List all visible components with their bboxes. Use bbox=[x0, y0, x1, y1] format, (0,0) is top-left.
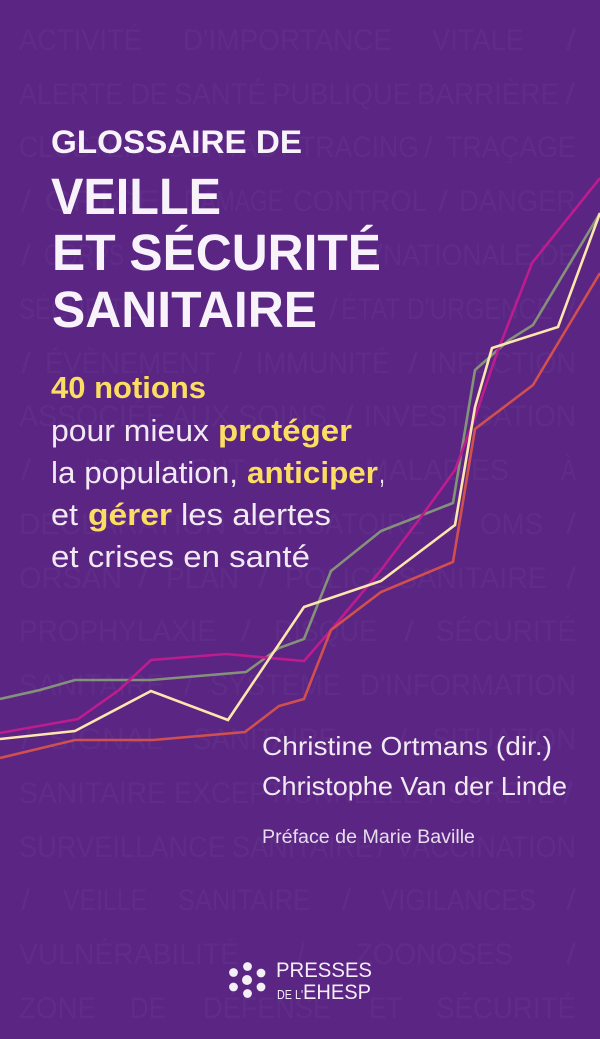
subtitle line: et gérer les alertes bbox=[51, 497, 331, 532]
background glossary word pattern: DE bbox=[130, 992, 166, 1025]
subtitle text block bbox=[51, 370, 385, 574]
background glossary word pattern: ASSOCIÉE AUX SOINS bbox=[19, 400, 327, 433]
background glossary word pattern: SANITAIRE bbox=[232, 831, 373, 864]
background glossary word pattern: INFECTION bbox=[430, 347, 576, 380]
background glossary word pattern: EXCEPTIONNELLE bbox=[174, 777, 421, 810]
publisher name: EHESP bbox=[303, 981, 371, 1004]
preface credit: Préface de Marie Baville bbox=[262, 827, 475, 848]
background glossary word pattern: / bbox=[233, 347, 244, 380]
background glossary word pattern: / bbox=[21, 347, 32, 380]
background glossary word pattern: TRAÇAGE bbox=[446, 131, 576, 164]
background glossary word pattern: / bbox=[21, 884, 31, 917]
background glossary word pattern: / bbox=[398, 723, 408, 756]
background glossary word pattern: SITUATION bbox=[432, 723, 576, 756]
background glossary word pattern: VACCINATION bbox=[396, 831, 576, 864]
subtitle line: et gérer les alertes: gérer bbox=[88, 497, 172, 532]
authors bbox=[262, 731, 567, 848]
subtitle line: la population, anticiper: , bbox=[379, 455, 385, 490]
background glossary word pattern: D'IMPORTANCE bbox=[183, 24, 392, 57]
background glossary word pattern: OMS bbox=[480, 508, 543, 541]
background glossary word pattern: SANITAIRE bbox=[19, 777, 166, 810]
background glossary word pattern: DAMAGE bbox=[184, 185, 283, 218]
background glossary word pattern: SANITAIRE bbox=[193, 723, 337, 756]
background glossary word pattern: / bbox=[566, 938, 577, 971]
background glossary word pattern: SÉCURITÉ bbox=[19, 293, 139, 326]
background glossary word pattern: ORSAN bbox=[19, 562, 122, 595]
subtitle line: pour mieux protéger: protéger bbox=[218, 413, 352, 448]
background glossary word pattern: / bbox=[138, 562, 149, 595]
background glossary word pattern: / bbox=[565, 78, 576, 111]
background glossary word pattern: ÉVÈNEMENT bbox=[45, 347, 216, 380]
background glossary word pattern: / bbox=[566, 562, 577, 595]
background glossary word pattern: VITALE bbox=[432, 24, 524, 57]
background glossary word pattern: INVESTIGATION bbox=[364, 400, 576, 433]
icon: dot cluster bbox=[229, 962, 265, 998]
background glossary word pattern: NATIONALE DE bbox=[383, 239, 576, 272]
subtitle line: et gérer les alertes: les alertes bbox=[181, 497, 331, 532]
background glossary word pattern: PROPHYLAXIE bbox=[19, 615, 216, 648]
background glossary word pattern: / bbox=[344, 400, 355, 433]
background glossary word pattern: / bbox=[438, 185, 449, 218]
background glossary word pattern: / bbox=[258, 562, 269, 595]
subtitle line: la population, anticiper: anticiper bbox=[247, 455, 378, 490]
background glossary word pattern: / bbox=[377, 831, 387, 864]
line: magenta curve bbox=[0, 178, 600, 733]
background glossary word pattern: / bbox=[373, 239, 384, 272]
background glossary word pattern: ACTIVITÉ bbox=[19, 24, 142, 57]
subtitle line: pour mieux protéger bbox=[51, 413, 352, 448]
background glossary word pattern: / bbox=[342, 884, 352, 917]
background glossary word pattern: VULNÉRABILITÉ bbox=[19, 938, 239, 971]
background glossary word pattern: / bbox=[21, 454, 32, 487]
background glossary word pattern: SANITAIRE bbox=[19, 669, 165, 702]
background glossary word pattern: DÉFENSE bbox=[203, 992, 331, 1025]
background glossary word pattern: / bbox=[408, 347, 419, 380]
subtitle: 40 notions: 40 notions bbox=[51, 370, 206, 405]
background glossary word pattern: / bbox=[184, 669, 194, 702]
background glossary word pattern: / bbox=[21, 185, 32, 218]
background glossary word pattern: / bbox=[446, 508, 457, 541]
background glossary word pattern: / bbox=[424, 131, 434, 164]
title line: glossaire de: GLOSSAIRE DE bbox=[51, 124, 302, 160]
background glossary word pattern: / bbox=[566, 293, 577, 326]
background glossary word pattern: SURVEILLANCE bbox=[19, 831, 226, 864]
publisher logo bbox=[229, 959, 372, 1004]
background glossary word pattern: DANGER bbox=[459, 185, 576, 218]
background glossary word pattern: PUBLIQUE bbox=[272, 78, 411, 111]
title bbox=[51, 124, 381, 338]
background glossary word pattern: RISQUE bbox=[274, 615, 377, 648]
title line: sanitaire: SANITAIRE bbox=[52, 281, 317, 338]
background glossary word pattern: / bbox=[329, 293, 339, 326]
line: pale yellow curve bbox=[0, 213, 600, 739]
background glossary word pattern: / bbox=[404, 615, 415, 648]
background glossary word pattern: / bbox=[297, 938, 306, 971]
background glossary word pattern: SÛRETÉ bbox=[448, 776, 555, 810]
background glossary word pattern: VIGILANCES bbox=[381, 884, 536, 917]
title line: et sécurité: ET SÉCURITÉ bbox=[52, 224, 381, 281]
background glossary word pattern: POLICE SANITAIRE bbox=[285, 562, 547, 595]
line: grey-green curve bbox=[0, 213, 600, 699]
publisher name bbox=[276, 959, 372, 1004]
background glossary word pattern: ZOONOSES bbox=[356, 938, 513, 971]
background glossary word pattern: / bbox=[21, 723, 32, 756]
background glossary word pattern: VEILLE bbox=[63, 884, 147, 917]
background glossary word pattern: ALERTE DE bbox=[19, 78, 168, 111]
background glossary word pattern: ÉTAT D'URGENCE bbox=[341, 293, 553, 326]
background glossary word pattern: PLAN bbox=[166, 562, 239, 595]
background glossary word pattern: DÉCLARATION bbox=[19, 508, 226, 541]
background glossary word pattern: / bbox=[268, 454, 279, 487]
background glossary word pattern: SANTÉ bbox=[174, 78, 266, 111]
background glossary word pattern: À bbox=[561, 454, 576, 487]
background glossary word pattern: SÉCURITÉ bbox=[436, 615, 576, 648]
subtitle line: la population, anticiper: la population, bbox=[51, 455, 238, 490]
background glossary word pattern: / bbox=[566, 508, 577, 541]
subtitle line: et crises en santé: et crises en santé bbox=[51, 539, 310, 574]
line chart: four rising curves bbox=[0, 178, 600, 758]
background glossary word pattern: CORPS bbox=[44, 239, 124, 272]
background glossary word pattern: SANITAIRE bbox=[178, 884, 310, 917]
background glossary word pattern: / bbox=[241, 615, 252, 648]
background glossary word pattern: BARRIÈRE bbox=[417, 78, 559, 111]
background glossary word pattern: / bbox=[21, 239, 32, 272]
subtitle line: la population, anticiper bbox=[51, 455, 385, 490]
background glossary word pattern: / bbox=[563, 777, 574, 810]
publisher name: DE L' bbox=[277, 987, 303, 1002]
background glossary word pattern: SÉCURITÉ bbox=[436, 992, 576, 1025]
author: Christophe Van der Linde: Christophe Van der Linde bbox=[262, 771, 567, 801]
background glossary word pattern: / bbox=[566, 884, 577, 917]
background glossary word pattern: OBLIGATOIRE bbox=[241, 508, 425, 541]
background glossary word pattern: CONTROL bbox=[293, 185, 427, 218]
background glossary word pattern: CLUSTER / CONTACT TRACING bbox=[19, 131, 419, 164]
background glossary word pattern: ZONE bbox=[19, 992, 96, 1025]
subtitle line: et gérer les alertes: et bbox=[51, 497, 78, 532]
line: red-orange curve bbox=[0, 273, 600, 758]
subtitle line: pour mieux protéger: pour mieux bbox=[51, 413, 210, 448]
background glossary word pattern: IMMUNITÉ bbox=[256, 347, 390, 380]
background glossary word pattern: SIGNAL bbox=[48, 723, 163, 756]
background glossary word pattern: CRISE bbox=[44, 185, 161, 218]
background glossary word pattern: / bbox=[566, 24, 577, 57]
background glossary word pattern: / bbox=[429, 777, 439, 810]
background glossary word pattern: ISOLEMENT bbox=[84, 454, 245, 487]
background glossary word pattern: SYSTÈME bbox=[210, 669, 341, 702]
publisher name: PRESSES bbox=[276, 959, 372, 982]
background glossary word pattern: D'INFORMATION bbox=[360, 669, 576, 702]
background glossary word pattern: ET bbox=[369, 992, 402, 1025]
background glossary word pattern: MALADIES bbox=[365, 454, 509, 487]
author: Christine Ortmans: Christine Ortmans (dir.) bbox=[262, 731, 552, 761]
title line: veille: VEILLE bbox=[51, 168, 221, 225]
